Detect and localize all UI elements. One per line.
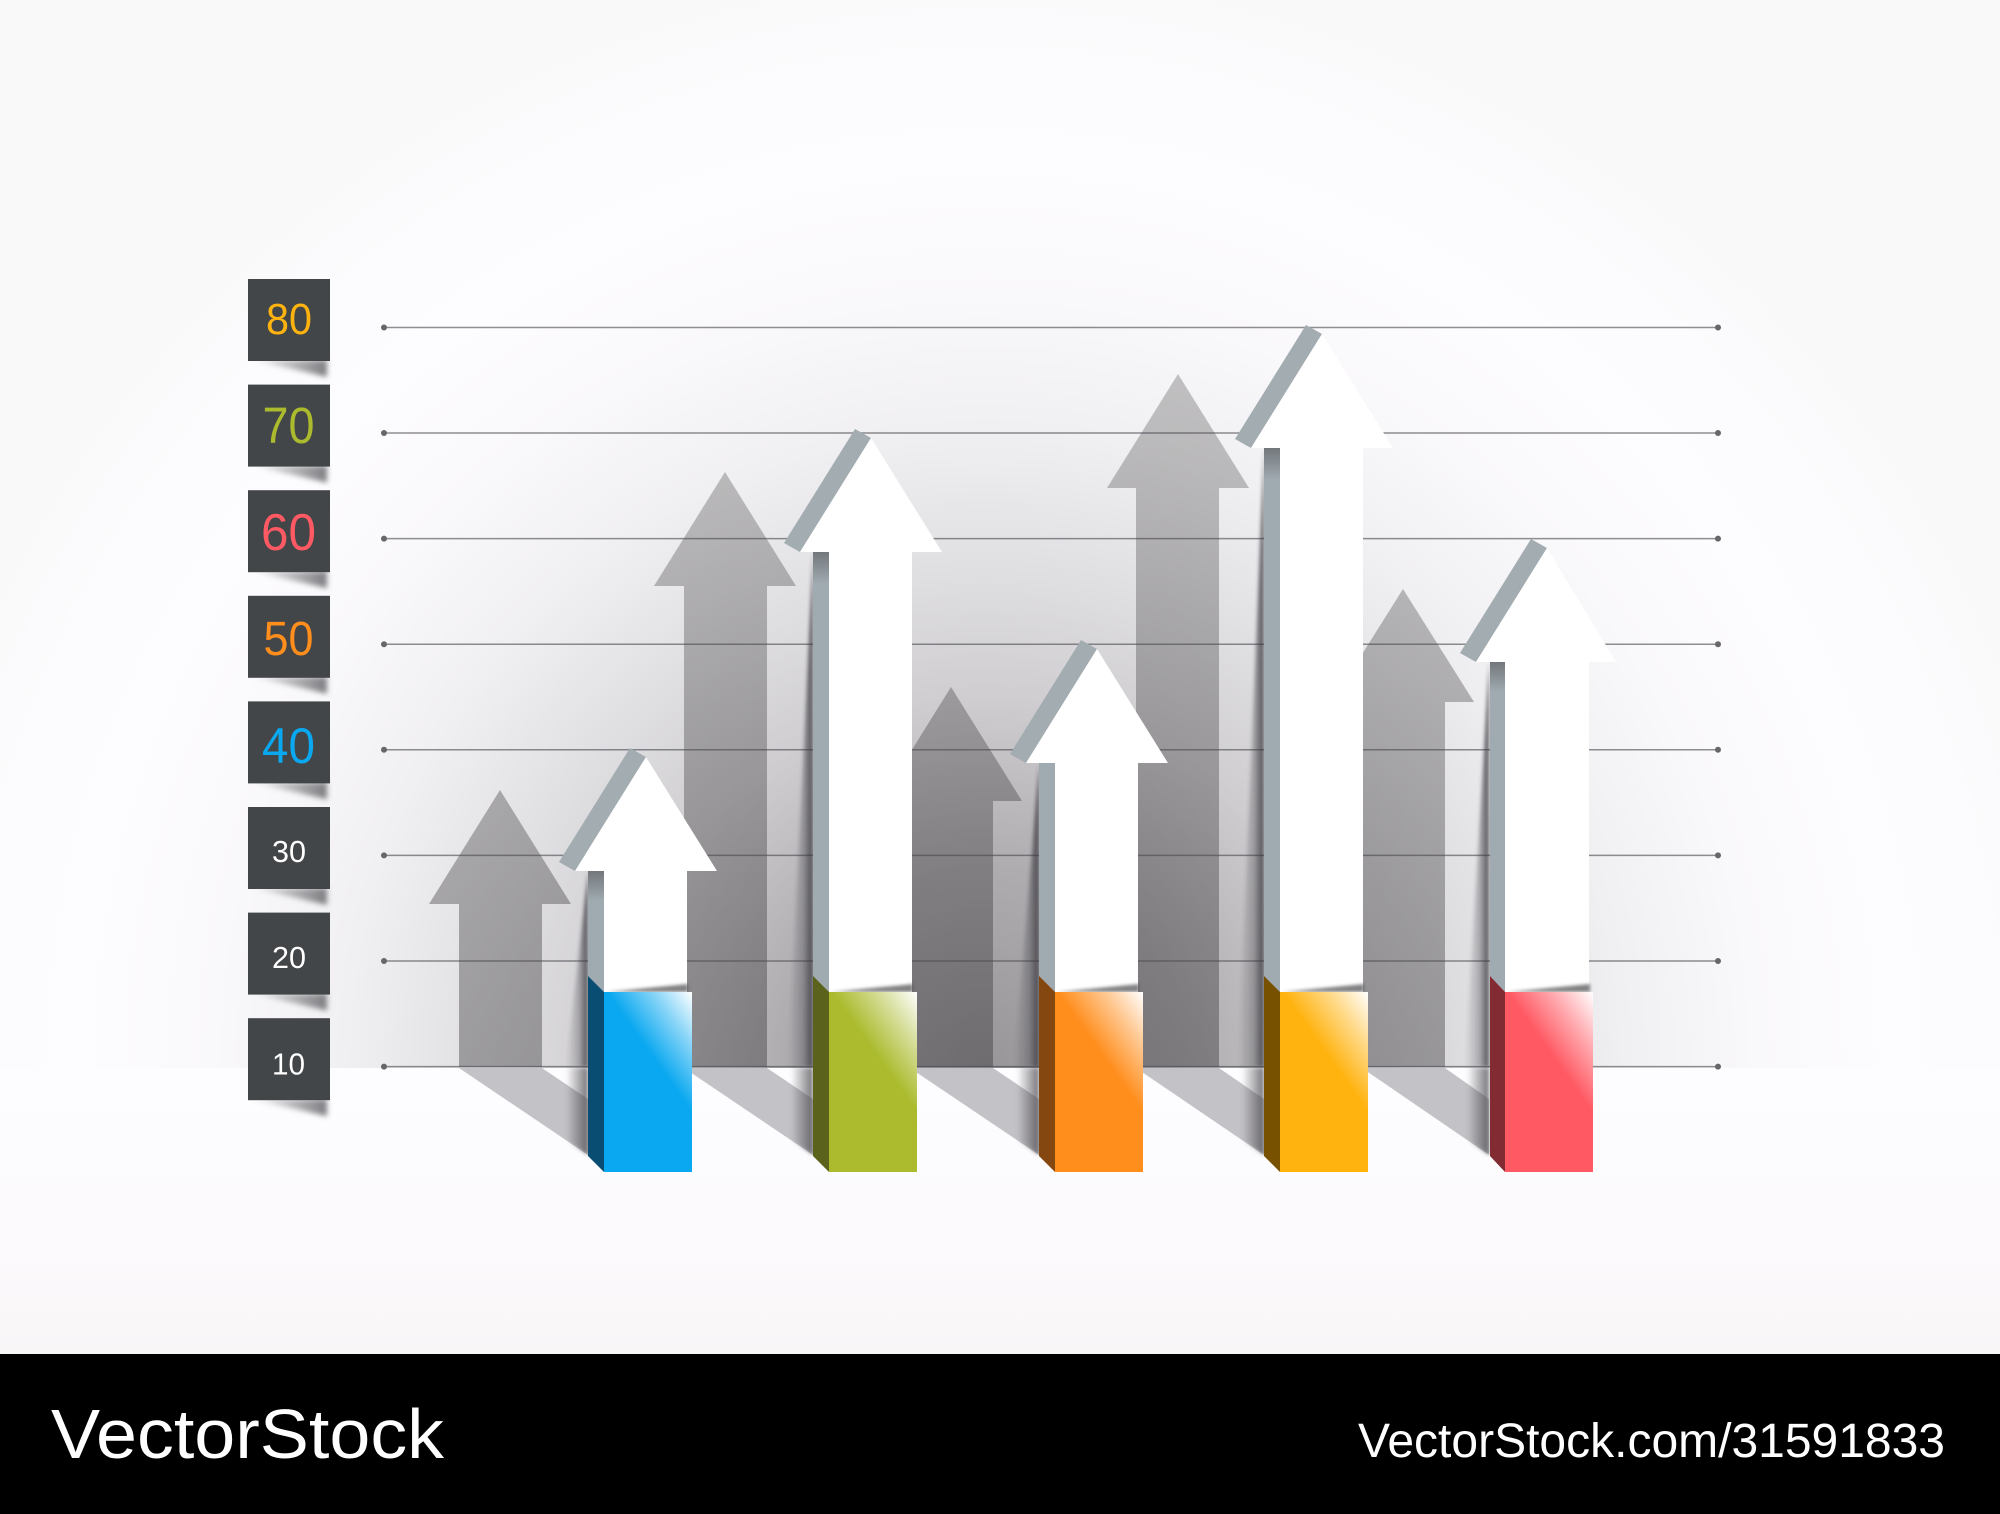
green arrow side [813, 552, 829, 992]
tag 50: 50 [264, 613, 314, 666]
footer url: VectorStock.com/31591833 [1358, 1415, 1945, 1468]
green arrow ribbon [784, 429, 871, 552]
tag 80: 80 [266, 295, 312, 344]
wall contact shadows [566, 448, 1489, 1067]
orange arrow base shadow [1057, 984, 1139, 992]
blue arrow base shadow [606, 984, 688, 992]
background shadow arrows [429, 374, 1474, 1067]
orange arrow side [1039, 763, 1055, 992]
wall background [0, 0, 2000, 1068]
grid lines [381, 324, 1721, 1070]
shadow arrow 3 [880, 687, 1022, 1067]
arrow column: red 60 [1460, 539, 1616, 1172]
arrow column: green 70 [784, 429, 942, 1172]
orange arrow ribbon [1010, 640, 1097, 763]
floor background [0, 1068, 2000, 1354]
y-axis tags [248, 279, 330, 1116]
arrow column: yellow 80 [1235, 325, 1393, 1172]
tag 70 [248, 385, 330, 483]
footer band [0, 1354, 2000, 1514]
yellow arrow base shadow [1282, 984, 1364, 992]
orange arrow face [1026, 649, 1168, 992]
tag 80 [248, 279, 330, 377]
tag 70: 70 [262, 397, 314, 454]
red arrow base shadow [1507, 984, 1590, 992]
tag 30: 30 [272, 834, 306, 869]
tag 60: 60 [261, 504, 316, 562]
footer brand: VectorStock [51, 1395, 445, 1473]
tag 30 [248, 807, 330, 905]
shadow arrow 2 [654, 472, 796, 1067]
red arrow face [1476, 548, 1616, 992]
shadow arrow 1 [429, 790, 571, 1067]
tag 10: 10 [272, 1046, 305, 1082]
orange bar [1039, 976, 1143, 1172]
red arrow ribbon [1460, 539, 1547, 662]
green arrow base shadow [831, 984, 913, 992]
yellow arrow face [1251, 334, 1393, 992]
tag 50 [248, 596, 330, 694]
tag 10 [248, 1018, 330, 1116]
yellow arrow ribbon [1235, 325, 1322, 448]
tag 20: 20 [272, 940, 306, 975]
red bar [1490, 976, 1593, 1172]
green bar [813, 976, 917, 1172]
shadow arrow 5 [1332, 589, 1474, 1067]
blue arrow face [575, 757, 717, 992]
floor shadow bands [459, 1068, 1489, 1155]
blue bar [588, 976, 692, 1172]
floor contact shadows [566, 1068, 1489, 1155]
tag 60 [248, 490, 330, 588]
arrow column: orange 50 [1010, 640, 1168, 1172]
tag 20 [248, 913, 330, 1011]
green arrow face [800, 438, 942, 992]
tag 40 [248, 701, 330, 799]
blue arrow side [588, 871, 604, 992]
arrow column: blue 30 [559, 748, 717, 1172]
yellow bar [1264, 976, 1368, 1172]
blue arrow ribbon [559, 748, 646, 871]
tag 40: 40 [262, 718, 315, 774]
shadow arrow 4 [1107, 374, 1249, 1067]
red arrow side [1490, 662, 1505, 992]
yellow arrow side [1264, 448, 1280, 992]
